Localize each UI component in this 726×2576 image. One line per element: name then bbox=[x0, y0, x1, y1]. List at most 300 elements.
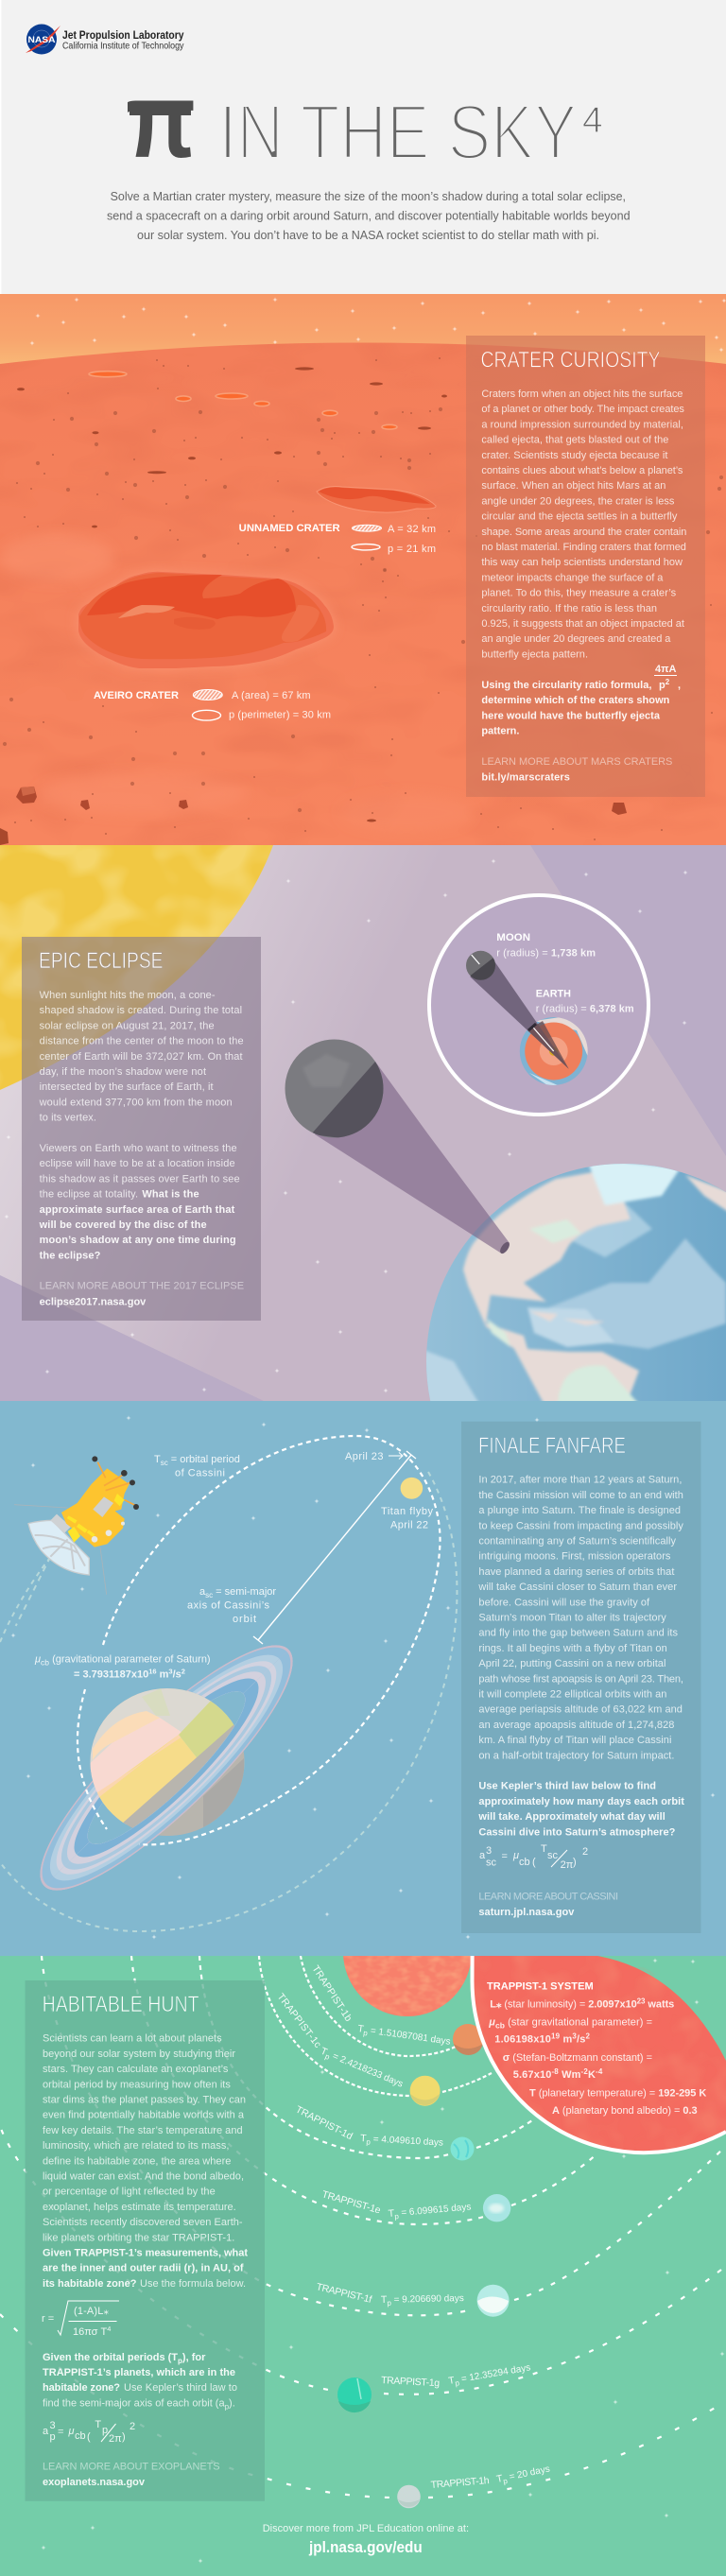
footer bbox=[263, 2523, 469, 2556]
orbit labels: axis of Cassini’s bbox=[187, 1600, 270, 1612]
planets bbox=[337, 2024, 510, 2508]
label: aveiro crater: AVEIRO CRATER bbox=[94, 690, 179, 701]
formula: kepler third law: sc bbox=[547, 1850, 558, 1861]
body text: April 22, putting Cassini on a new orbital bbox=[478, 1658, 666, 1669]
body text: shape. Some areas around the crater contain bbox=[481, 527, 686, 538]
body text: crater. Scientists study ejecta because it bbox=[481, 450, 667, 461]
body text: to keep Cassini from impacting and possibly bbox=[478, 1520, 683, 1531]
orbit labels: = 3.7931187x10 bbox=[74, 1669, 148, 1681]
body text: will take Cassini closer to Saturn than ever bbox=[477, 1582, 677, 1593]
heading: FINALE FANFARE bbox=[478, 1433, 626, 1459]
unnamed crater bbox=[317, 487, 436, 512]
label: aveiro crater: p (perimeter) = 30 km bbox=[229, 710, 331, 721]
body text: intersected by the surface of Earth, it bbox=[40, 1081, 214, 1093]
intro paragraph: Solve a Martian crater mystery, measure the size of the moon’s shadow during a total solar eclipse, bbox=[111, 190, 626, 203]
question: will take. Approximately what day will bbox=[477, 1811, 666, 1823]
label: aveiro crater bbox=[94, 690, 331, 721]
small bright craters bbox=[89, 372, 397, 429]
stars bbox=[10, 1415, 716, 1940]
planet c bbox=[410, 2076, 441, 2106]
body text: a round impression surrounded by material, bbox=[481, 419, 683, 430]
question two: Use Kepler’s third law to bbox=[124, 2382, 237, 2394]
learn more: LEARN MORE ABOUT EXOPLANETS bbox=[43, 2461, 220, 2472]
body text: stars. They can calculate an exoplanet’s bbox=[43, 2064, 229, 2075]
body text: and fly into the gap between Saturn and its bbox=[478, 1628, 679, 1639]
body text: angle under 20 degrees, the crater is less bbox=[481, 495, 675, 507]
body text: contaminating any of Saturn’s scientifically bbox=[478, 1535, 677, 1547]
planet f bbox=[477, 2285, 510, 2317]
body text: a plunge into Saturn. The finale is designed bbox=[478, 1505, 681, 1516]
question: moon’s shadow at any one time during bbox=[40, 1235, 236, 1246]
body text: like planets orbiting the star TRAPPIST-1. bbox=[43, 2232, 234, 2243]
body text: distance from the center of the moon to the bbox=[40, 1036, 244, 1047]
inset: trappist system bbox=[454, 1956, 726, 2174]
body text: liquid water can exist. And the bond albedo, bbox=[43, 2170, 244, 2182]
system data: 5.67x10 bbox=[513, 2069, 551, 2081]
body text: this way can help scientists understand how bbox=[481, 557, 683, 568]
stars bbox=[4, 858, 688, 1393]
body text: intriguing moons. First, mission operators bbox=[478, 1551, 671, 1563]
planet labels: TRAPPIST-1d bbox=[294, 2104, 354, 2142]
orbit labels: a bbox=[199, 1586, 205, 1598]
question two: TRAPPIST-1’s planets, which are in the bbox=[43, 2367, 235, 2378]
title: 4 bbox=[582, 100, 603, 141]
question: Use the formula below. bbox=[140, 2278, 246, 2290]
formula: kepler third law: ( bbox=[532, 1857, 536, 1868]
intro paragraph bbox=[107, 190, 631, 242]
question two: habitable zone? bbox=[43, 2382, 120, 2394]
inset: moon and earth scale circle: r (radius) = 1,738 km bbox=[496, 948, 596, 960]
orbit labels: of Cassini bbox=[175, 1468, 225, 1479]
planet labels: TRAPPIST-1h bbox=[430, 2475, 490, 2491]
question two: find the semi-major axis of each orbit (a bbox=[43, 2397, 225, 2409]
body text: the Cassini mission will come to an end with bbox=[478, 1490, 683, 1501]
body text: or percentage of light reflected by the bbox=[43, 2187, 216, 2198]
formula: kepler third law: ) bbox=[573, 1857, 577, 1868]
question: are the inner and outer radii (r), in AU, of bbox=[43, 2263, 244, 2274]
orbit labels: cb bbox=[41, 1657, 49, 1667]
system data: TRAPPIST-1 SYSTEM bbox=[487, 1980, 594, 1992]
titan bbox=[401, 1478, 423, 1499]
panel: habitable hunt bbox=[25, 1980, 265, 2501]
system data: K bbox=[588, 2069, 596, 2081]
question two: p bbox=[178, 2357, 182, 2365]
footer: jpl.nasa.gov/edu bbox=[308, 2538, 423, 2556]
formula: kepler: p bbox=[49, 2431, 56, 2443]
formula: kepler third law: 3 bbox=[486, 1845, 492, 1857]
body text: an average apoapsis altitude of 1,274,828 bbox=[478, 1720, 674, 1731]
planet labels: = 9.206690 days bbox=[391, 2293, 464, 2306]
intro paragraph: our solar system. You don’t have to be a NASA rocket scientist to do stellar math with pi. bbox=[137, 229, 599, 242]
question: approximately how many days each orbit bbox=[478, 1796, 684, 1807]
question with formula: determine which of the craters shown bbox=[481, 695, 670, 706]
body text: orbital period by measuring how often its bbox=[43, 2079, 231, 2090]
system data: 23 bbox=[637, 1997, 646, 2005]
body text: it will complete 22 elliptical orbits with an bbox=[478, 1688, 666, 1700]
earth large bbox=[426, 1164, 726, 1401]
question: will be covered by the disc of the bbox=[39, 1219, 207, 1231]
semi-major axis line bbox=[253, 1451, 416, 1644]
rings front bbox=[45, 1651, 293, 1891]
orbit labels: = orbital period bbox=[168, 1454, 240, 1465]
orbit labels: April 23 bbox=[345, 1451, 384, 1462]
body text: circular and the ejecta settles in a butterfly bbox=[481, 511, 678, 523]
body text: called ejecta, that gets blasted out of the bbox=[481, 435, 668, 446]
formula: kepler third law: μ bbox=[512, 1850, 519, 1861]
header bbox=[0, 0, 631, 294]
system data bbox=[487, 1980, 706, 2117]
question: Cassini dive into Saturn’s atmosphere? bbox=[478, 1826, 676, 1838]
formula: kepler: 2π bbox=[109, 2433, 122, 2445]
planet labels: T bbox=[381, 2294, 387, 2306]
formula: kepler bbox=[43, 2419, 135, 2445]
question two: ), for bbox=[182, 2352, 206, 2363]
learn more: exoplanets.nasa.gov bbox=[43, 2477, 146, 2488]
body text: few key details. The star’s temperature and bbox=[43, 2125, 243, 2136]
system data: 19 bbox=[551, 2032, 561, 2041]
stars bbox=[41, 1958, 725, 2564]
heading: CRATER CURIOSITY bbox=[480, 348, 660, 372]
footer: Discover more from JPL Education online at: bbox=[263, 2523, 469, 2534]
logo: NASA JPL bbox=[26, 25, 184, 55]
body text: would extend 377,700 km from the moon bbox=[39, 1097, 233, 1108]
question with formula: pattern. bbox=[481, 726, 519, 737]
body text: Viewers on Earth who want to witness the bbox=[40, 1143, 237, 1154]
orbit labels: μ bbox=[34, 1653, 41, 1665]
small rocks bbox=[15, 358, 712, 839]
big boulders bbox=[0, 787, 627, 845]
question with formula: 2 bbox=[666, 678, 670, 686]
body text: of a planet or other body. The impact creates bbox=[481, 404, 684, 415]
cassini orbit bbox=[78, 1436, 441, 1844]
question with formula: Using the circularity ratio formula, bbox=[481, 680, 651, 691]
learn more bbox=[478, 1892, 618, 1918]
orbit labels: /s bbox=[173, 1669, 182, 1681]
body text: Saturn’s moon Titan to alter its trajectory bbox=[478, 1613, 666, 1624]
orbit labels: orbit bbox=[233, 1614, 256, 1625]
panel: finale fanfare bbox=[461, 1422, 701, 1933]
system data: -8 bbox=[551, 2067, 559, 2076]
star trappist-1 bbox=[340, 1888, 475, 2019]
body text: butterfly ejecta pattern. bbox=[481, 648, 588, 660]
system data: T (planetary temperature) = 192-295 K bbox=[529, 2087, 706, 2099]
body text: rings. It all begins with a flyby of Titan on bbox=[478, 1643, 667, 1654]
system data: μ bbox=[488, 2016, 495, 2028]
formula: kepler third law: 2 bbox=[582, 1846, 588, 1858]
logo: NASA JPL: NASA bbox=[28, 35, 56, 45]
body text: circularity ratio. If the ratio is less than bbox=[481, 603, 657, 614]
logo: NASA JPL: Jet Propulsion Laboratory bbox=[62, 30, 184, 42]
body text: an angle under 20 degrees and created a bbox=[481, 633, 671, 645]
formula: kepler: 2 bbox=[130, 2421, 135, 2432]
body text: average periapsis altitude of 63,022 km and bbox=[478, 1704, 683, 1716]
formula: kepler third law bbox=[479, 1843, 588, 1871]
planet labels: T bbox=[319, 2046, 329, 2058]
panel: cassini section bbox=[0, 1401, 726, 1956]
panel: trappist section bbox=[0, 1888, 726, 2576]
planet labels: TRAPPIST-1e bbox=[320, 2188, 382, 2217]
orbit labels: (gravitational parameter of Saturn) bbox=[49, 1653, 211, 1665]
body text: define its habitable zone, the area where bbox=[43, 2155, 231, 2167]
formula: kepler: cb bbox=[75, 2430, 86, 2442]
orbit labels: sc bbox=[205, 1591, 213, 1599]
question: What is the bbox=[142, 1189, 199, 1201]
planet d bbox=[450, 2136, 475, 2161]
body text bbox=[43, 2033, 246, 2243]
planet labels bbox=[275, 1963, 551, 2491]
body text: meteor impacts change the surface of a bbox=[481, 572, 664, 583]
orbit labels: m bbox=[157, 1669, 169, 1681]
formula: habitable zone radius: r = bbox=[42, 2313, 54, 2325]
question bbox=[43, 2248, 248, 2290]
planet labels: p bbox=[387, 2299, 392, 2308]
system data: (star gravitational parameter) = bbox=[505, 2016, 652, 2028]
question two: ). bbox=[229, 2397, 235, 2409]
system data: 1.06198x10 bbox=[494, 2034, 551, 2046]
system data: m bbox=[560, 2034, 572, 2046]
body text: km. A final flyby of Titan will place Cassini bbox=[478, 1735, 671, 1746]
label: aveiro crater: A (area) = 67 km bbox=[232, 690, 311, 701]
learn more bbox=[40, 1281, 244, 1307]
learn more: eclipse2017.nasa.gov bbox=[40, 1296, 147, 1307]
aveiro crater bbox=[78, 572, 334, 668]
formula: habitable zone radius: 16πσ T bbox=[73, 2326, 107, 2338]
question: Use Kepler’s third law below to find bbox=[478, 1781, 656, 1792]
formula: kepler: 3 bbox=[49, 2420, 56, 2431]
body text: to its vertex. bbox=[40, 1113, 96, 1124]
question with formula: p bbox=[659, 680, 666, 691]
ground texture bbox=[6, 539, 106, 577]
formula: kepler: T bbox=[95, 2419, 101, 2430]
planet labels: = 4.049610 days bbox=[371, 2135, 443, 2149]
question bbox=[477, 1781, 684, 1838]
planet labels: p bbox=[324, 2052, 332, 2062]
space background bbox=[0, 845, 726, 1401]
mars sky bbox=[0, 294, 726, 370]
system data: -2 bbox=[581, 2067, 588, 2076]
body text: contains clues about what’s below a planet’s bbox=[481, 465, 683, 476]
inset: moon and earth scale circle: r (radius) = 6,378 km bbox=[536, 1004, 634, 1015]
system data: Wm bbox=[559, 2069, 581, 2081]
body text: 0.925, it suggests that an object impacted at bbox=[481, 618, 684, 630]
planet labels: T bbox=[447, 2375, 456, 2387]
formula: kepler third law: 2π bbox=[561, 1859, 574, 1871]
planet body bbox=[91, 1688, 244, 1836]
learn more: LEARN MORE ABOUT CASSINI bbox=[478, 1892, 618, 1903]
logo: NASA JPL: California Institute of Technology bbox=[62, 42, 183, 51]
body text: In 2017, after more than 12 years at Saturn, bbox=[478, 1475, 682, 1486]
heading: EPIC ECLIPSE bbox=[39, 948, 163, 974]
planet labels: TRAPPIST-1g bbox=[381, 2375, 441, 2389]
body text: beyond our solar system by studying their bbox=[43, 2049, 235, 2060]
panel: crater curiosity bbox=[466, 336, 705, 797]
question with formula: here would have the butterfly ejecta bbox=[481, 710, 661, 721]
body text: Scientists recently discovered seven Earth- bbox=[43, 2217, 243, 2228]
intro paragraph: send a spacecraft on a daring orbit around Saturn, and discover potentially habitable worlds beyond bbox=[107, 210, 631, 223]
body text: surface. When an object hits Mars at an bbox=[481, 480, 666, 492]
formula: kepler third law: sc bbox=[486, 1857, 497, 1868]
sunlight beam bbox=[0, 845, 726, 1401]
orbit labels: 2 bbox=[182, 1668, 185, 1676]
spacecraft cassini bbox=[14, 1456, 139, 1626]
body text: When sunlight hits the moon, a cone- bbox=[40, 990, 216, 1001]
formula: habitable zone radius bbox=[42, 2301, 119, 2338]
outer faint orbit bbox=[0, 1472, 457, 1931]
formula: habitable zone radius: (1-A)L⁎ bbox=[74, 2306, 110, 2317]
formula: kepler: ( bbox=[87, 2431, 91, 2443]
planet labels: TRAPPIST-1f bbox=[315, 2281, 373, 2306]
label: unnamed crater: A = 32 km bbox=[388, 524, 436, 535]
orbit labels: 3 bbox=[168, 1668, 173, 1676]
orbit labels: = semi-major bbox=[213, 1586, 276, 1598]
body text: solar eclipse on August 21, 2017, the bbox=[40, 1020, 215, 1031]
learn more: LEARN MORE ABOUT MARS CRATERS bbox=[481, 756, 672, 768]
title: IN THE SKY bbox=[219, 88, 577, 176]
body text: eclipse will have to be at a location inside bbox=[40, 1158, 235, 1169]
formula: kepler: = bbox=[58, 2426, 63, 2437]
system data: L⁎ (star luminosity) = 2.0097x10 bbox=[490, 1998, 637, 2010]
dark pits bbox=[17, 367, 447, 822]
body text: even find potentially habitable worlds with a bbox=[43, 2110, 245, 2121]
learn more: bit.ly/marscraters bbox=[481, 771, 570, 783]
body text: luminosity, which are related to its mass, bbox=[43, 2140, 229, 2152]
formula: habitable zone radius: 4 bbox=[107, 2325, 111, 2333]
formula: kepler: p bbox=[102, 2425, 108, 2436]
planet labels: TRAPPIST-1c bbox=[275, 1992, 323, 2050]
inset: moon and earth scale circle bbox=[429, 895, 648, 1115]
mars ground bbox=[0, 342, 726, 845]
background bbox=[0, 1401, 726, 1956]
learn more bbox=[481, 756, 672, 783]
inset: moon and earth scale circle: EARTH bbox=[536, 988, 571, 999]
orbit labels: 16 bbox=[148, 1668, 157, 1676]
body text: Craters form when an object hits the surface bbox=[481, 389, 683, 400]
system data: /s bbox=[577, 2034, 585, 2046]
formula: kepler third law: a bbox=[479, 1850, 486, 1861]
body text: on a half-orbit trajectory for Saturn impact. bbox=[478, 1750, 674, 1761]
rings back bbox=[40, 1645, 293, 1891]
body text: shaped shadow is created. During the total bbox=[40, 1005, 242, 1016]
formula: kepler third law: cb bbox=[519, 1857, 530, 1868]
question with formula: 4πA bbox=[655, 664, 677, 675]
sun bbox=[0, 845, 284, 1096]
question: the eclipse? bbox=[40, 1250, 101, 1261]
label: unnamed crater: p = 21 km bbox=[388, 544, 436, 555]
panel: mars section bbox=[0, 294, 726, 845]
planet labels: TRAPPIST-1b bbox=[309, 1963, 354, 2024]
system data: cb bbox=[495, 2020, 505, 2030]
orbit labels: Titan flyby bbox=[381, 1506, 433, 1517]
body text: this shadow as it passes over Earth to see bbox=[40, 1173, 240, 1184]
planet b bbox=[453, 2024, 483, 2055]
planet g bbox=[337, 2377, 372, 2412]
planet labels: T bbox=[388, 2207, 395, 2220]
body text bbox=[39, 990, 244, 1201]
background bbox=[0, 1956, 726, 2576]
system data: -4 bbox=[596, 2067, 603, 2076]
question: its habitable zone? bbox=[43, 2278, 137, 2290]
planet labels: T bbox=[357, 2023, 365, 2035]
solar flares bbox=[624, 1968, 726, 2075]
question bbox=[39, 1189, 236, 1261]
planet labels: = 2.4218233 days bbox=[328, 2050, 405, 2090]
system data: σ (Stefan-Boltzmann constant) = bbox=[503, 2052, 652, 2064]
body text: path whose first apoapsis is on April 23. Then, bbox=[478, 1673, 683, 1685]
body text: before. Cassini will use the gravity of bbox=[478, 1597, 650, 1608]
system data: watts bbox=[645, 1998, 674, 2010]
learn more bbox=[43, 2461, 220, 2488]
planet labels: p bbox=[394, 2212, 400, 2221]
question two: Given the orbital periods (T bbox=[43, 2352, 178, 2363]
formula: kepler: ) bbox=[122, 2431, 126, 2443]
medium rocks bbox=[5, 409, 721, 810]
planet h bbox=[397, 2485, 421, 2508]
heading: HABITABLE HUNT bbox=[43, 1992, 199, 2017]
title bbox=[126, 61, 603, 180]
formula: kepler third law: = bbox=[501, 1851, 508, 1862]
body text bbox=[481, 389, 686, 660]
planet labels: = 12.35294 days bbox=[458, 2362, 531, 2385]
stars in sky bbox=[29, 297, 726, 353]
formula: kepler: μ bbox=[68, 2426, 75, 2437]
body text bbox=[477, 1475, 683, 1761]
title: π bbox=[126, 61, 196, 180]
body text: no blast material. Finding craters that formed bbox=[481, 542, 686, 553]
question: Given TRAPPIST-1’s measurements, what bbox=[43, 2248, 248, 2259]
planet labels: = 6.099615 days bbox=[398, 2202, 472, 2219]
body text: Scientists can learn a lot about planets bbox=[43, 2033, 222, 2045]
orbit labels: sc bbox=[161, 1459, 168, 1467]
question: approximate surface area of Earth that bbox=[40, 1204, 235, 1216]
planet labels: = 20 days bbox=[506, 2464, 551, 2483]
orbit labels: April 22 bbox=[390, 1519, 428, 1530]
planet labels: p bbox=[502, 2477, 509, 2486]
planet labels: T bbox=[495, 2473, 504, 2485]
body text: star dims as the planet passes by. They can bbox=[43, 2095, 246, 2106]
system data: 2 bbox=[586, 2032, 591, 2041]
planet labels: p bbox=[455, 2378, 460, 2388]
formula: kepler third law: T bbox=[541, 1843, 547, 1855]
learn more: LEARN MORE ABOUT THE 2017 ECLIPSE bbox=[40, 1281, 244, 1292]
planet labels: T bbox=[360, 2133, 367, 2144]
body text: exoplanet, helps estimate its temperature. bbox=[43, 2202, 236, 2213]
inset: moon and earth scale circle: MOON bbox=[496, 932, 530, 943]
orbit labels bbox=[34, 1451, 433, 1681]
planet labels: p bbox=[366, 2137, 372, 2147]
orbit labels: T bbox=[154, 1454, 161, 1465]
label: unnamed crater bbox=[239, 523, 436, 555]
question with formula: , bbox=[678, 680, 681, 691]
panel: epic eclipse bbox=[22, 937, 261, 1321]
learn more: saturn.jpl.nasa.gov bbox=[478, 1907, 575, 1918]
panel: eclipse section bbox=[0, 845, 726, 1409]
question with formula bbox=[481, 664, 681, 737]
saturn bbox=[40, 1645, 293, 1891]
body text: day, if the moon’s shadow were not bbox=[40, 1066, 206, 1078]
body text: center of Earth will be 372,027 km. On that bbox=[40, 1051, 243, 1063]
question two: p bbox=[225, 2403, 230, 2411]
formula: kepler: a bbox=[43, 2426, 49, 2437]
body text: have planned a daring series of orbits that bbox=[478, 1566, 674, 1578]
planet e bbox=[483, 2194, 510, 2222]
planet labels: p bbox=[363, 2029, 369, 2038]
moon large bbox=[279, 1035, 511, 1255]
system data: A (planetary bond albedo) = 0.3 bbox=[552, 2105, 698, 2117]
system data: 3 bbox=[572, 2032, 577, 2041]
planet labels: = 1.51087081 days bbox=[367, 2026, 451, 2048]
question two bbox=[43, 2352, 237, 2411]
body text: the eclipse at totality. bbox=[40, 1189, 138, 1201]
